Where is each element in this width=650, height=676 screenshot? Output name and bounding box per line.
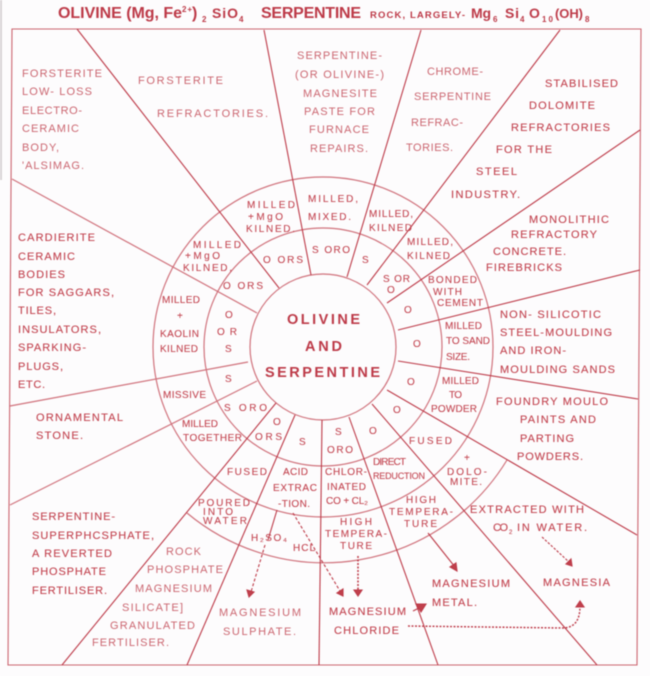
text: serpentine superphosphate: A REVERTED (32, 548, 112, 560)
text: magnesium chloride: CHLORIDE (334, 625, 399, 637)
text: ornamental stone: ORNAMENTAL (36, 412, 123, 424)
panel: outer ring process labels: MIXED. (308, 212, 351, 223)
text: forsterite electro-ceramic: BODY, (22, 142, 59, 154)
text: bottom outer band labels: WATER (203, 516, 247, 527)
text: chrome-serpentine refractories: TORIES. (406, 142, 453, 154)
panel: outer ring process labels: MILLED (162, 295, 200, 306)
arrow: HCl to magnesium chloride (293, 513, 343, 596)
title: ) (192, 5, 197, 22)
panel: outer ring process labels: DIRECT (373, 457, 406, 468)
panel: outer ring process labels: CHLOR- (325, 467, 367, 478)
text: moulding sands: NON- SILICOTIC (500, 309, 601, 321)
text: moulding sands: AND IRON- (500, 345, 566, 357)
arrow: sulphuric acid to magnesium sulphate (247, 510, 277, 597)
panel: inner ring mineral labels: O (413, 339, 421, 350)
text: monolithic refractory: FIREBRICKS (486, 262, 562, 274)
text: foundry mould paints: PARTING (520, 433, 574, 445)
text: granulated fertiliser: FERTILISER. (92, 637, 169, 649)
panel: inner ring mineral labels: OR (217, 327, 237, 338)
text: ornamental stone (36, 412, 123, 442)
panel: inner ring mineral labels: O (225, 310, 233, 321)
panel: inner ring mineral labels: S ORO (312, 245, 350, 256)
text: extracted with CO2: IN WATER. (517, 522, 587, 534)
panel: outer ring process labels: ACID (283, 467, 308, 478)
panel: outer ring process labels: TO (449, 390, 462, 401)
text: bottom outer band labels: HIGH (340, 517, 372, 528)
text: granulated fertiliser: MAGNESIUM (135, 583, 212, 595)
panel: outer ring process labels: KILNED. (246, 224, 295, 235)
text: forsterite electro-ceramic: FORSTERITE (22, 68, 102, 80)
centre label: OLIVINE (287, 312, 360, 328)
panel: outer ring process labels: CEMENT (437, 298, 483, 309)
text: monolithic refractory: CONCRETE. (493, 246, 566, 258)
text: foundry mould paints (496, 396, 608, 463)
text: chrome-serpentine refractories: SERPENTINE (414, 91, 491, 103)
panel: outer ring process labels: KILNED, (183, 263, 232, 274)
text: bottom outer band labels: TURE (340, 541, 372, 552)
text: stabilised dolomite refractories: REFRACTORIES (511, 122, 610, 134)
panel: inner ring mineral labels: O (273, 417, 281, 428)
panel: inner ring mineral labels: S OR (383, 274, 410, 285)
text: serpentine magnesite paste: (OR OLIVINE-) (295, 69, 384, 81)
panel: outer ring process labels: WITH (433, 287, 462, 298)
panel: outer ring process labels: MISSIVE (163, 390, 206, 401)
text: monolithic refractory: MONOLITHIC (529, 214, 609, 226)
panel: inner ring mineral labels: S (225, 374, 232, 385)
panel: outer ring process labels: MILLED, (369, 209, 413, 220)
text: serpentine magnesite paste: MAGNESITE (303, 88, 377, 100)
panel: outer products, top left (22, 50, 491, 172)
text: monolithic refractory: REFRACTORY (511, 229, 598, 241)
panel: outer products, right (329, 78, 618, 637)
panel: outer ring process labels: KAOLIN (160, 329, 199, 340)
title: SiO (212, 5, 238, 21)
panel: inner ring mineral labels: O (393, 405, 401, 416)
text: bottom outer band labels: HIGH (406, 495, 436, 506)
centre label: AND (305, 339, 342, 355)
centre label: SERPENTINE (265, 365, 380, 381)
text: forsterite electro-ceramic: CERAMIC (22, 123, 79, 135)
text: stabilised dolomite refractories (451, 78, 618, 201)
arrow: high temperature to magnesium metal (428, 533, 457, 571)
title: ROCK, LARGELY- (370, 10, 465, 21)
title: 4 (520, 15, 525, 24)
text: bottom outer band labels: HCL (293, 543, 315, 554)
text: moulding sands: MOULDING SANDS (500, 364, 615, 376)
text: magnesium metal: MAGNESIUM (432, 578, 510, 590)
text: bottom outer band labels: DOLO- (447, 467, 487, 478)
text: bottom outer band labels: H₂SO₄ (251, 533, 287, 544)
text: foundry mould paints: POWDERS. (517, 451, 583, 463)
panel: outer ring process labels: MILLED, (407, 237, 453, 248)
title: 6 (493, 15, 498, 24)
text: bottom outer band labels: POURED (198, 498, 250, 509)
text: serpentine magnesite paste: PASTE FOR (304, 106, 375, 118)
text: bottom outer band labels: MITE. (450, 477, 482, 488)
text: forsterite refractories: FORSTERITE (138, 75, 223, 87)
text: moulding sands (500, 309, 615, 376)
text: serpentine superphosphate: SERPENTINE- (32, 511, 115, 523)
text: cardierite ceramic bodies: BODIES (18, 269, 65, 281)
text: chrome-serpentine refractories: REFRAC- (411, 117, 463, 129)
text: cardierite ceramic bodies: CARDIERITE (18, 232, 95, 244)
text: cardierite ceramic bodies: FOR SAGGARS, (18, 287, 114, 299)
title (58, 5, 590, 24)
text: magnesium metal (432, 578, 510, 609)
panel: outer ring process labels: -TION. (278, 499, 310, 510)
panel: outer ring process labels: MILLED (182, 419, 218, 430)
panel: outer ring process labels: + (177, 311, 183, 322)
panel: outer ring process labels: INATED (327, 482, 366, 493)
text: serpentine superphosphate: SUPERPHCSPHATE, (32, 530, 154, 542)
panel: inner ring mineral labels: O ORS (263, 255, 303, 266)
title: SERPENTINE (261, 5, 361, 22)
text: granulated fertiliser (92, 546, 223, 649)
panel: outer ring process labels: CO + CL₂ (326, 496, 368, 507)
text: extracted with CO2 (470, 504, 587, 536)
text: magnesium metal: METAL. (432, 597, 477, 609)
text: magnesium sulphate (219, 607, 301, 638)
text: magnesia: MAGNESIA (543, 577, 611, 589)
panel: outer ring process labels: TO SAND (446, 336, 490, 347)
text: bottom outer band labels: TEMPERA- (325, 529, 387, 540)
panel: inner ring mineral labels: S (225, 344, 232, 355)
panel: outer ring process labels: FUSED (227, 467, 267, 478)
title: 2+ (182, 5, 192, 14)
title: 2 (202, 15, 207, 24)
arrow: high temperature to magnesium chloride (354, 556, 362, 596)
panel: inner ring mineral labels: O (369, 426, 377, 437)
text: bottom outer band labels (198, 453, 487, 554)
text: granulated fertiliser: GRANULATED (110, 620, 195, 632)
text: serpentine magnesite paste (295, 50, 384, 155)
panel: outer ring process labels: KILNED (407, 251, 450, 262)
title: Si (505, 5, 519, 21)
title: (OH) (555, 6, 583, 21)
panel: inner ring mineral labels: O (407, 377, 415, 388)
text: granulated fertiliser: PHOSPHATE (147, 564, 223, 576)
panel: outer ring process labels: KILNED (160, 344, 198, 355)
panel: outer ring process labels: +MgO (185, 251, 220, 262)
text: magnesium sulphate: MAGNESIUM (219, 607, 301, 619)
text: granulated fertiliser: SILICATE] (122, 602, 183, 614)
panel: outer ring process labels: MILLED (445, 321, 482, 332)
panel: inner ring mineral labels: S (335, 427, 342, 438)
panel: outer ring process labels: TOGETHER (183, 433, 242, 444)
panel: outer ring process labels: SIZE. (446, 352, 470, 363)
text: serpentine magnesite paste: SERPENTINE- (297, 50, 382, 62)
panel: outer ring process labels: MILLED (193, 240, 241, 251)
text: chrome-serpentine refractories (406, 66, 491, 154)
concentric process rings (153, 177, 507, 563)
panel: inner ring mineral labels: ORS (255, 432, 282, 443)
panel: outer ring process labels: MILLED (442, 376, 479, 387)
panel: outer products, left and bottom (18, 232, 301, 649)
text: bottom outer band labels: INTO (203, 507, 233, 518)
text: stabilised dolomite refractories: INDUSTRY. (451, 189, 520, 201)
panel: outer ring process labels: REDUCTION (373, 471, 425, 481)
title: OLIVINE (Mg, Fe (58, 5, 182, 22)
panel: outer ring process labels (160, 194, 490, 554)
title: 4 (239, 15, 244, 24)
text: cardierite ceramic bodies: PLUGS, (18, 361, 63, 373)
text: forsterite electro-ceramic: 'ALSIMAG. (22, 160, 84, 172)
text: magnesium sulphate: SULPHATE. (223, 626, 296, 638)
text: stabilised dolomite refractories: FOR THE (496, 144, 552, 156)
text: foundry mould paints: PAINTS AND (520, 414, 596, 426)
panel: inner ring mineral labels: S (299, 437, 306, 448)
text: stabilised dolomite refractories: STABILISED (545, 78, 618, 90)
panel: inner ring mineral labels (217, 245, 421, 456)
panel: outer ring process labels: MILLED, (308, 194, 358, 205)
text: ornamental stone: STONE. (36, 430, 83, 442)
panel: inner ring mineral labels: S (362, 255, 369, 266)
title: O (529, 5, 540, 21)
centre label (265, 312, 380, 381)
text: stabilised dolomite refractories: DOLOMITE (529, 100, 595, 112)
text: cardierite ceramic bodies: ETC. (18, 379, 45, 391)
panel: outer ring process labels: KILNED (369, 223, 412, 234)
title: 8 (585, 15, 590, 24)
panel: inner ring mineral labels: ORO (327, 445, 353, 456)
text: forsterite electro-ceramic: LOW- LOSS (22, 86, 92, 98)
text: magnesium chloride: MAGNESIUM (329, 606, 406, 618)
title: 10 (542, 15, 554, 24)
text: granulated fertiliser: ROCK (166, 546, 202, 558)
arrow: CO2 extraction to magnesia (542, 537, 572, 566)
arrow: magnesium chloride to metal (413, 604, 426, 612)
text: forsterite refractories (138, 75, 268, 120)
text: forsterite electro-ceramic: ELECTRO- (22, 105, 82, 117)
text: serpentine superphosphate: PHOSPHATE (32, 566, 106, 578)
panel: outer ring process labels: EXTRAC (273, 483, 317, 494)
text: extracted with CO2: CO (493, 522, 508, 534)
text: cardierite ceramic bodies: INSULATORS, (18, 324, 101, 336)
text: cardierite ceramic bodies: TILES, (18, 305, 56, 317)
text: extracted with CO2: 2 (509, 530, 513, 536)
text: serpentine magnesite paste: FURNACE (309, 124, 369, 136)
panel: outer ring process labels: MILLED (247, 200, 295, 211)
text: cardierite ceramic bodies: SPARKING- (18, 342, 86, 354)
text: bottom outer band labels: TEMPERA- (389, 507, 453, 518)
panel: inner ring mineral labels: S ORO (224, 403, 267, 414)
text: cardierite ceramic bodies (18, 232, 114, 391)
panel: outer ring process labels: FUSED (409, 436, 452, 447)
text: bottom outer band labels: + (464, 453, 470, 464)
panel: outer ring process labels: BONDED (428, 275, 477, 286)
panel: inner ring mineral labels: O (387, 285, 395, 296)
text: monolithic refractory (486, 214, 609, 274)
text: forsterite refractories: REFRACTORIES. (157, 108, 268, 120)
text: forsterite electro-ceramic (22, 68, 102, 172)
panel: outer ring process labels: POWDER (431, 404, 477, 415)
arrow: magnesium chloride to magnesia (408, 601, 584, 628)
text: serpentine magnesite paste: REPAIRS. (310, 143, 368, 155)
text: chrome-serpentine refractories: CHROME- (427, 66, 483, 78)
title: Mg (471, 5, 491, 21)
text: serpentine superphosphate (32, 511, 154, 597)
panel: inner ring mineral labels: O ORS (223, 281, 263, 292)
panel: outer ring process labels: +MgO (248, 212, 283, 223)
text: extracted with CO2: EXTRACTED WITH (470, 504, 584, 516)
text: moulding sands: STEEL-MOULDING (500, 327, 612, 339)
text: foundry mould paints: FOUNDRY MOULO (496, 396, 608, 408)
text: bottom outer band labels: TURE (404, 519, 437, 530)
text: cardierite ceramic bodies: CERAMIC (18, 251, 75, 263)
text: stabilised dolomite refractories: STEEL (476, 166, 517, 178)
panel: inner ring mineral labels: O (404, 305, 412, 316)
text: serpentine superphosphate: FERTILISER. (32, 585, 107, 597)
text: magnesium chloride (329, 606, 406, 637)
